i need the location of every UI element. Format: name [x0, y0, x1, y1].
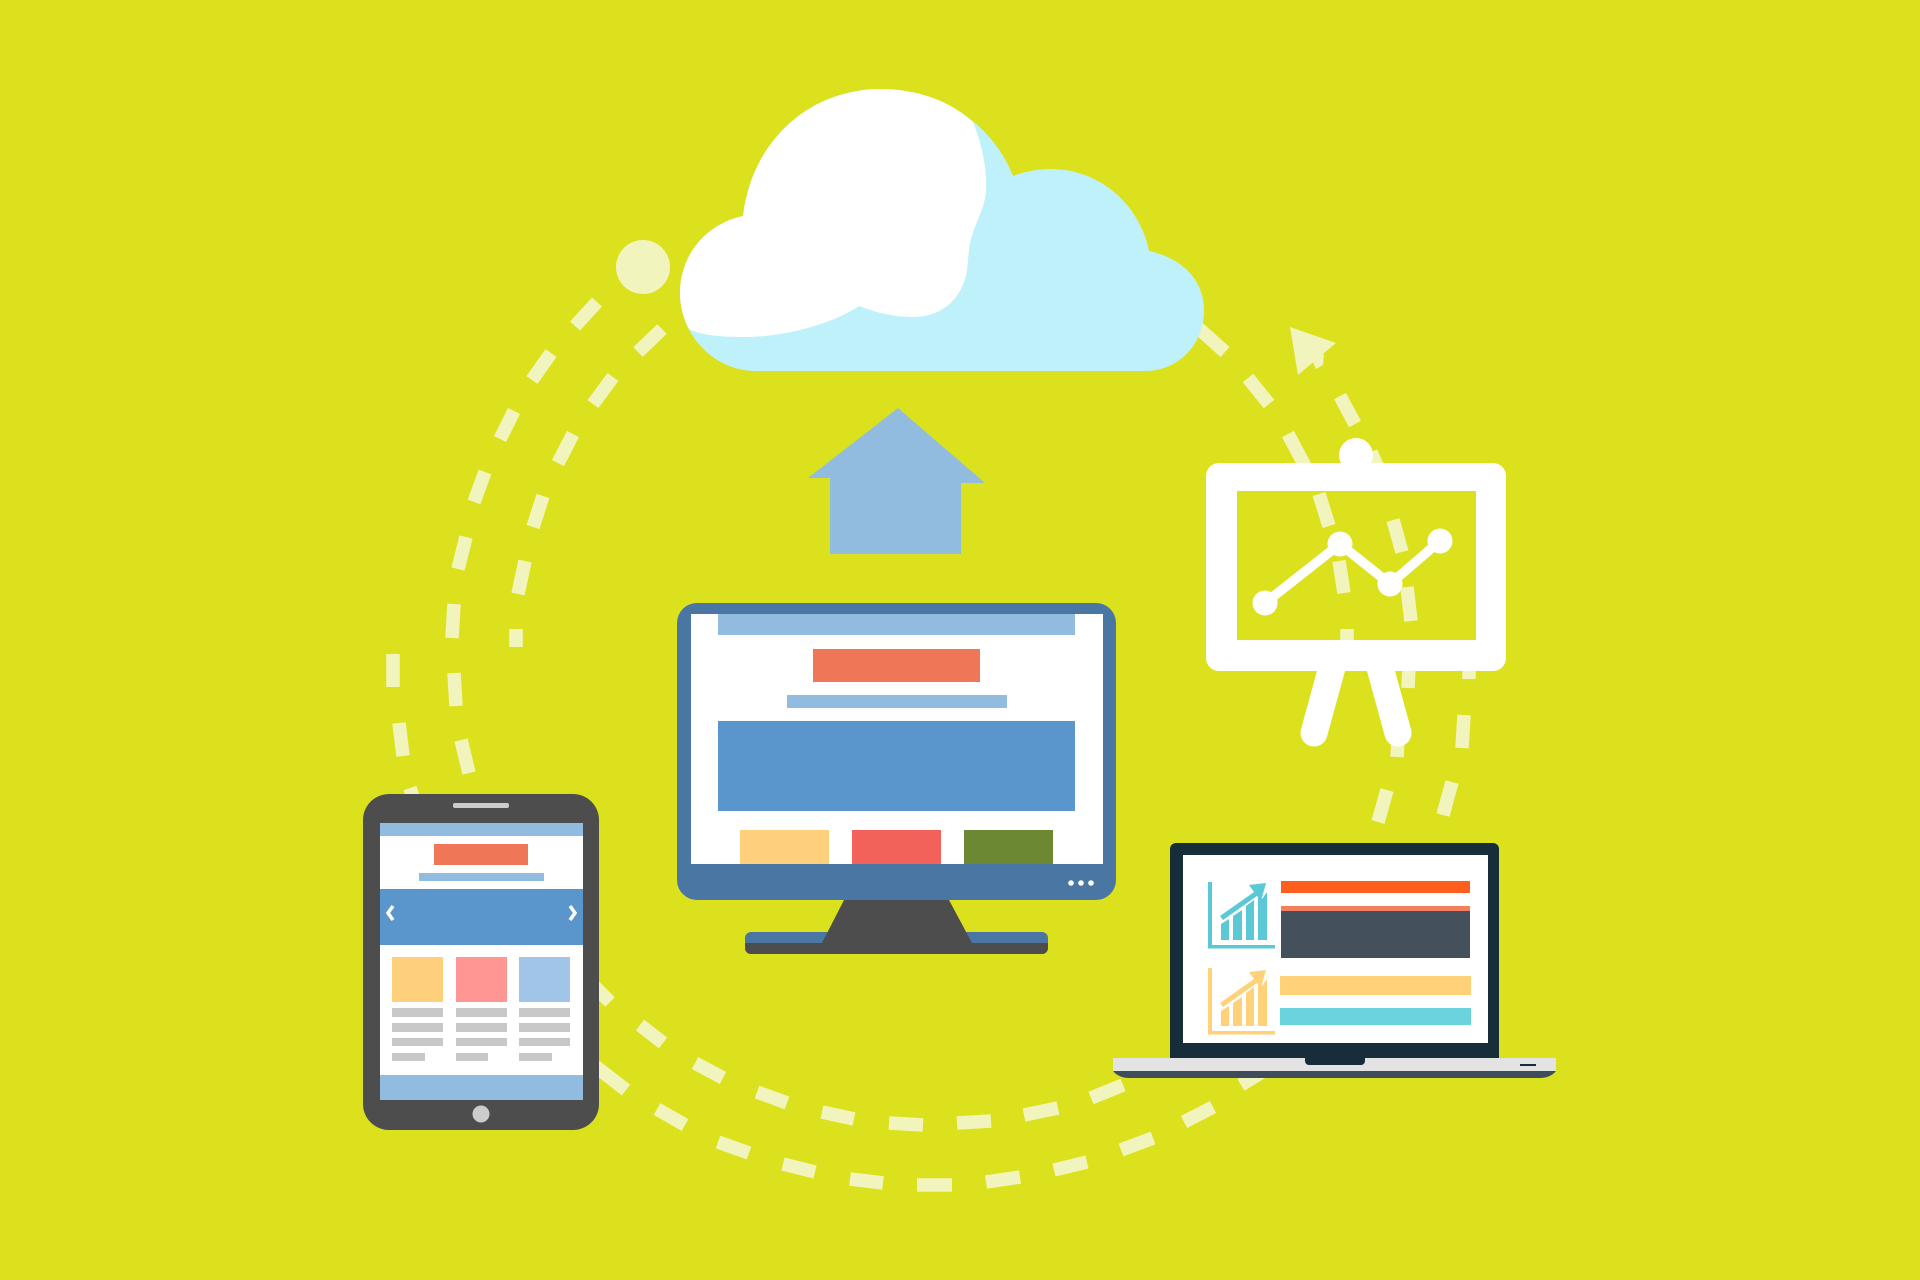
dashed arc: right outer, laptop side	[1378, 666, 1469, 822]
board frame	[1206, 463, 1506, 671]
laptop screen	[1183, 855, 1488, 1043]
cloud body	[680, 89, 1204, 371]
cloud highlight	[680, 89, 986, 337]
arrowhead: end of dashed arc	[1290, 327, 1336, 375]
dashed arc: bottom upper, tablet to laptop	[592, 984, 1123, 1125]
board legs	[1314, 660, 1398, 733]
line chart on board	[1252, 528, 1452, 616]
tablet body	[363, 794, 599, 1130]
dashed arc: bottom lower, tablet to laptop	[595, 1066, 1262, 1185]
monitor stand	[822, 900, 972, 943]
dashed arc: far-left stub above tablet	[393, 654, 414, 800]
monitor body	[677, 603, 1116, 900]
board knob	[1339, 438, 1373, 472]
chart icon: teal growth	[1208, 882, 1275, 948]
monitor screen	[691, 614, 1103, 864]
tablet speaker	[453, 803, 509, 808]
icon: cloud	[680, 89, 1204, 371]
icon: desktop monitor	[677, 603, 1116, 954]
dashed arc: left outer, from circle to tablet	[452, 302, 597, 773]
laptop content bars	[1280, 881, 1471, 1025]
dashed arc: left inner, from cloud downward	[516, 329, 662, 647]
arrow: upload to cloud	[808, 408, 985, 554]
icon: laptop	[1113, 843, 1556, 1078]
tablet text lines	[392, 1008, 570, 1061]
circle: start of dashed arc	[616, 240, 670, 294]
icon: tablet	[363, 794, 599, 1130]
dashed arc: right middle, toward arrowhead	[1340, 396, 1411, 757]
icon: presentation board	[1206, 438, 1506, 733]
tablet carousel arrows	[388, 906, 575, 920]
laptop base	[1113, 1058, 1556, 1078]
tablet home button	[472, 1106, 490, 1122]
dashed arc: right inner, from cloud into presentation board	[1196, 326, 1347, 645]
laptop lid	[1170, 843, 1499, 1058]
chart icon: yellow growth	[1208, 968, 1275, 1034]
tablet screen	[380, 823, 583, 1100]
monitor control dots	[1068, 880, 1094, 886]
monitor base bar	[745, 932, 1048, 954]
laptop hinge notch	[1305, 1057, 1365, 1065]
